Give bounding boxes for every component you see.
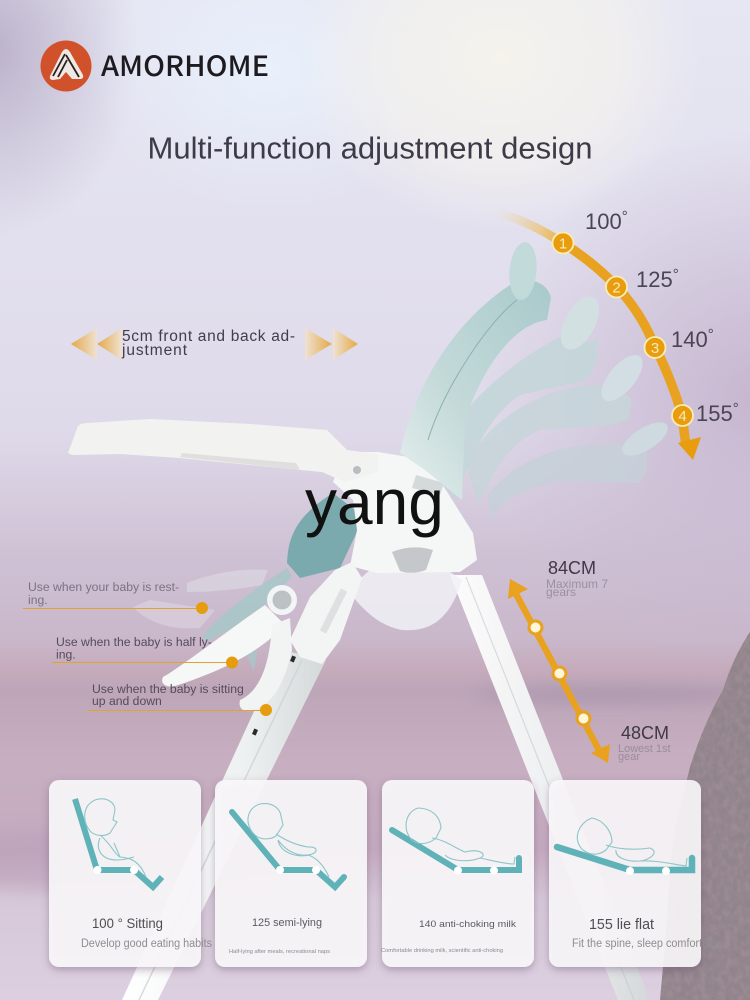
height label: 84CM: Maximum 7	[546, 577, 608, 591]
seat icon	[392, 808, 519, 874]
height label: 48CM: 48CM	[621, 723, 669, 743]
logo	[40, 40, 269, 92]
seat icon	[75, 799, 162, 887]
heading: 155 lie flat	[589, 917, 654, 933]
brand name: AMORHOME	[101, 45, 269, 85]
height arrow	[508, 579, 610, 763]
card: 155 lie flat	[549, 780, 722, 967]
heading: 140 anti-choking milk	[419, 919, 516, 930]
callout: half lying	[52, 635, 238, 668]
marker 2	[606, 276, 627, 298]
height label: 48CM: Lowest 1st	[618, 743, 671, 755]
callout: resting	[23, 580, 208, 614]
front and back adjustment: justment	[121, 342, 188, 359]
front legs	[122, 650, 326, 1000]
angle labels: 125	[636, 267, 673, 292]
lower arm	[240, 618, 292, 711]
marker 1: 1	[559, 236, 567, 252]
leg rest strap	[203, 568, 292, 642]
heading: 100 ° Sitting	[92, 915, 163, 931]
angle labels: 155	[696, 401, 733, 426]
description: Develop good eating habits	[81, 938, 212, 950]
marker 4: 4	[678, 408, 687, 425]
angle labels	[585, 208, 739, 426]
height label: 48CM: gear	[618, 751, 640, 763]
heading: 125 semi-lying	[252, 917, 322, 929]
marker 4	[672, 405, 693, 426]
description: Half-lying after meals, recreational naps	[229, 949, 330, 955]
callout: sitting: up and down	[92, 694, 162, 708]
seat pad	[287, 493, 364, 578]
foot rest arm	[162, 605, 285, 686]
card: 125 semi-lying	[215, 780, 367, 967]
seat bowl	[347, 565, 462, 630]
front post	[290, 562, 362, 664]
callout: resting: ing.	[28, 593, 48, 607]
card: 100 sitting	[49, 780, 212, 967]
callout: sitting: Use when the baby is sitting	[92, 682, 244, 696]
marker 2: 2	[612, 280, 621, 296]
tray	[68, 419, 378, 482]
front and back adjustment	[71, 328, 358, 360]
marker 3: 3	[651, 340, 659, 357]
description: Comfortable drinking milk, scientific anti-choking	[381, 948, 503, 954]
angle labels: °	[673, 266, 679, 283]
marker 3	[644, 337, 666, 358]
description: Fit the spine, sleep comfortably	[572, 938, 722, 950]
recline button	[392, 547, 433, 573]
seat icon	[232, 804, 344, 887]
height label: 84CM: 84CM	[548, 558, 596, 578]
seat shell	[333, 452, 477, 573]
marker 1	[552, 232, 574, 254]
height label: 48CM	[618, 723, 671, 763]
height label: 84CM: gears	[546, 585, 576, 599]
wing latch	[412, 475, 444, 495]
high chair	[68, 241, 673, 1000]
backrest position 4	[488, 416, 673, 520]
rear leg	[450, 575, 650, 1000]
seat icon	[557, 818, 692, 875]
angle labels: °	[622, 208, 628, 225]
front and back adjustment: 5cm front and back ad-	[122, 328, 295, 345]
rock	[660, 632, 750, 1000]
height buttons	[290, 655, 296, 663]
backrest position 1	[400, 241, 551, 500]
angle labels: 100	[585, 209, 622, 234]
callout: half lying: ing.	[56, 648, 76, 662]
recline arc arrow	[497, 213, 701, 460]
angle labels: 140	[671, 327, 708, 352]
card: 140 anti-choking milk	[381, 780, 534, 967]
backrest position 3	[466, 348, 650, 505]
height label: 84CM	[546, 558, 608, 599]
ghost tray and leg rest	[133, 570, 268, 628]
hub	[267, 585, 297, 615]
callout: half lying: Use when the baby is half ly-	[56, 635, 212, 649]
watermark: yang	[305, 466, 444, 538]
angle labels: °	[708, 326, 714, 343]
callout: sitting	[87, 682, 272, 716]
backrest position 2	[430, 290, 607, 500]
callout: resting: Use when your baby is rest-	[28, 580, 179, 594]
angle labels: °	[733, 400, 739, 417]
title: Multi-function adjustment design	[148, 130, 592, 166]
